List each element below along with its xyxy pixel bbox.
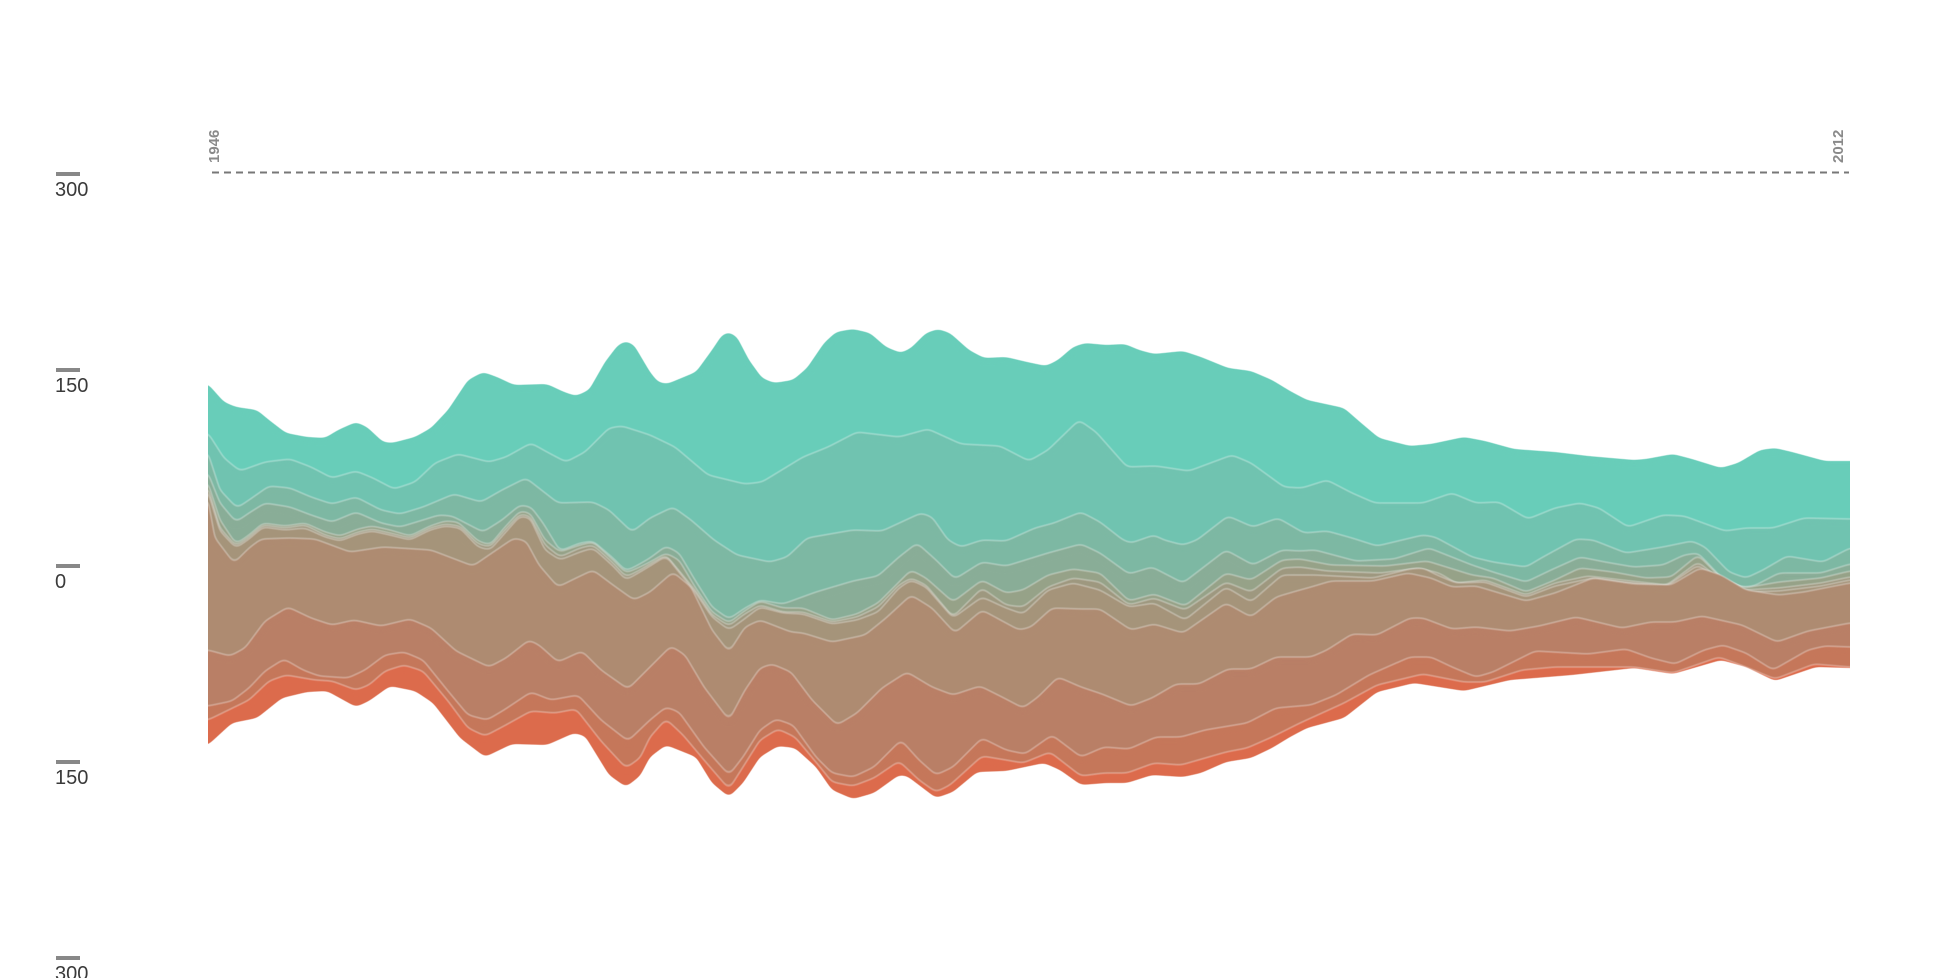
layer 10 (208, 644, 1850, 790)
tick: 150: 150 (55, 375, 88, 397)
layer 1: teal top band (208, 329, 1850, 531)
year label: 1946: 1946 (206, 130, 223, 163)
y-axis scale (55, 172, 88, 978)
tick: 300: 300 (55, 179, 88, 201)
layer 4 (208, 474, 1850, 620)
layer 8: large brown band (208, 502, 1850, 722)
time axis: dashed line with years (206, 130, 1849, 172)
tick: 0 (55, 564, 80, 593)
tick: 0: 0 (55, 571, 66, 593)
year label: 2012: 2012 (1830, 130, 1847, 163)
layer 2 (208, 421, 1850, 576)
lower silhouette edge of the stream (208, 660, 1850, 860)
layer 7 (208, 493, 1850, 632)
tick: lower 300 (55, 956, 88, 978)
streamgraph (208, 329, 1850, 798)
layer 6 (208, 489, 1850, 627)
layer 9 (208, 607, 1850, 776)
tick: lower 150: 150 (55, 767, 88, 789)
layer 3 (208, 454, 1850, 617)
layer 11: red bottom band (208, 656, 1850, 798)
layer 5 (208, 484, 1850, 624)
